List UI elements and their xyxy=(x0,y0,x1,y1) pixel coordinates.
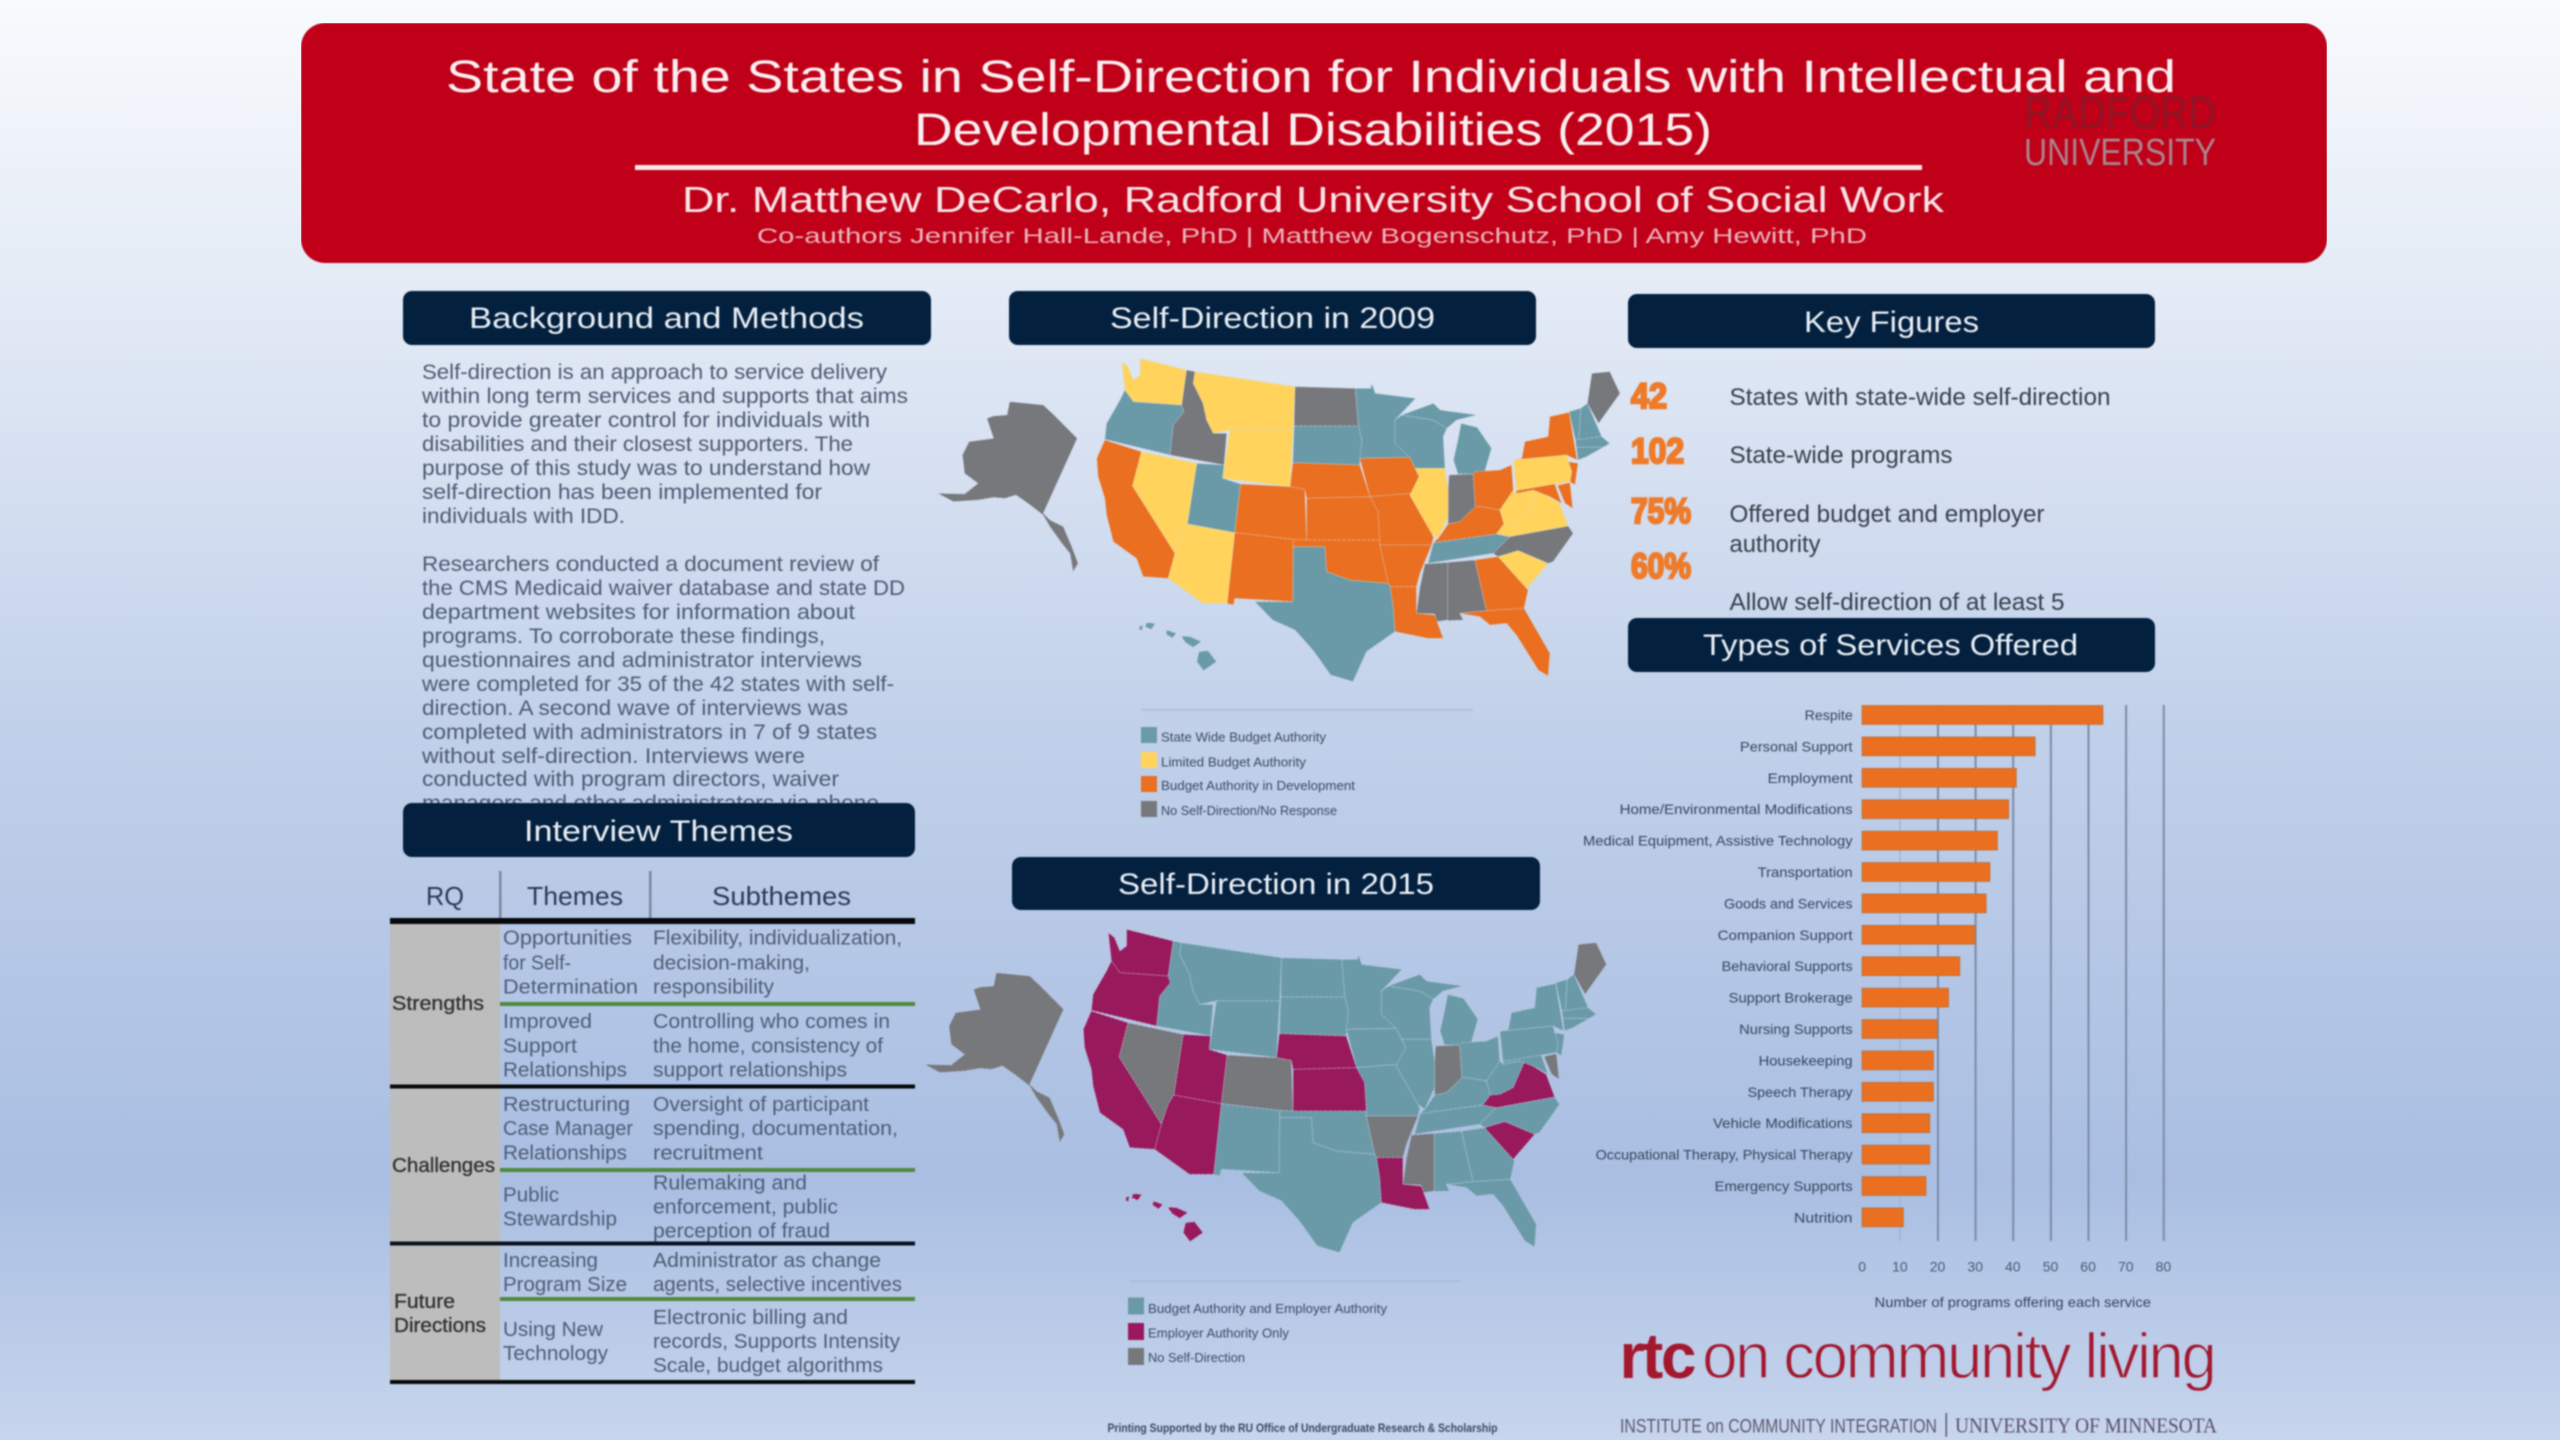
subthemes column: support relationships xyxy=(653,1060,847,1082)
RQ column shading xyxy=(390,924,500,1380)
table header row xyxy=(426,871,851,918)
figure: 102 programs xyxy=(1631,432,1952,471)
category labels: Speech Therapy xyxy=(1748,1084,1853,1100)
paragraph 2: programs. To corroborate these findings, xyxy=(422,625,825,648)
paragraph 1: self-direction has been implemented for xyxy=(422,481,822,504)
subthemes column: decision-making, xyxy=(653,953,810,975)
themes column: Program Size xyxy=(503,1274,627,1296)
axis tick labels: 0 xyxy=(1858,1258,1866,1274)
themes column: Improved xyxy=(503,1011,592,1033)
poster content xyxy=(301,23,2327,1438)
legend: 2009 map: Limited Budget Authority xyxy=(1161,756,1307,770)
figure: 42 states xyxy=(1631,377,2110,416)
states: limited budget authority xyxy=(1122,358,1572,603)
themes column: Restructuring xyxy=(503,1094,630,1116)
axis tick labels: 40 xyxy=(2005,1258,2021,1274)
heading: background and methods xyxy=(403,291,931,345)
category labels: Personal Support xyxy=(1740,738,1853,754)
title rule xyxy=(635,165,1922,170)
axis tick labels xyxy=(1858,1258,2171,1274)
legend: 2009 map: State Wide Budget Authority xyxy=(1161,730,1327,744)
category labels: Nutrition xyxy=(1794,1209,1852,1225)
category labels: Support Brokerage xyxy=(1729,990,1853,1006)
paragraph 2: department websites for information about xyxy=(422,601,855,624)
axis tick labels: 10 xyxy=(1892,1258,1908,1274)
axis tick labels: 60 xyxy=(2080,1258,2096,1274)
figure: 102 programs: State-wide programs xyxy=(1730,442,1952,469)
map: self-direction in 2015 xyxy=(924,929,1607,1253)
figure: 75% authority xyxy=(1631,492,2045,558)
subthemes column: records, Supports Intensity xyxy=(653,1331,900,1353)
table: interview themes xyxy=(390,871,915,1384)
category labels: Home/Environmental Modifications xyxy=(1620,801,1853,817)
category labels: Vehicle Modifications xyxy=(1713,1115,1852,1131)
subthemes column: Scale, budget algorithms xyxy=(653,1355,883,1377)
category labels: Emergency Supports xyxy=(1715,1178,1853,1194)
heading: key figures xyxy=(1628,294,2155,348)
paragraph 1: within long term services and supports that aims xyxy=(421,385,908,408)
category labels: Respite xyxy=(1805,707,1853,723)
subthemes column: recruitment xyxy=(653,1142,763,1164)
category labels: Medical Equipment, Assistive Technology xyxy=(1583,833,1853,849)
banner panel xyxy=(301,23,2327,263)
paragraph 1: purpose of this study was to understand how xyxy=(422,457,871,480)
bar chart: services offered xyxy=(1583,705,2171,1310)
figure: 42 states: 42 xyxy=(1631,377,1667,416)
panel: background and methods text xyxy=(421,361,908,815)
figure: 60% self-direction: Allow self-direction of at least 5 xyxy=(1730,589,2064,616)
states: state-wide budget authority xyxy=(1105,383,1610,682)
figure: 75% authority: 75% xyxy=(1631,492,1691,531)
axis tick labels: 20 xyxy=(1930,1258,1945,1274)
Radford University logo xyxy=(2024,87,2216,174)
figure: 60% self-direction xyxy=(1631,547,2064,616)
map: self-direction in 2009 xyxy=(938,358,1620,682)
Radford University logo: UNIVERSITY xyxy=(2024,132,2216,174)
subthemes column xyxy=(653,928,902,1377)
subthemes column: the home, consistency of xyxy=(653,1035,883,1057)
subthemes column: enforcement, public xyxy=(653,1196,838,1218)
paragraph 2: completed with administrators in 7 of 9 states xyxy=(422,721,877,744)
paragraph 1: disabilities and their closest supporters. The xyxy=(422,433,853,456)
paragraph 1 xyxy=(421,361,908,528)
axis title: Number of programs offering each service xyxy=(1874,1294,2151,1310)
states: Maryland and Delaware xyxy=(1503,1054,1559,1079)
table header row: Subthemes xyxy=(712,881,851,911)
paragraph 1: Self-direction is an approach to service delivery xyxy=(422,361,888,384)
category labels: Occupational Therapy, Physical Therapy xyxy=(1596,1147,1853,1163)
heading: key figures: Key Figures xyxy=(1804,306,1979,339)
heading: background and methods: Background and Methods xyxy=(469,302,864,335)
title: Developmental Disabilities (2015) xyxy=(914,104,1712,155)
legend: 2009 map: No Self-Direction/No Response xyxy=(1161,804,1337,818)
author: Dr. Matthew DeCarlo, Radford University School of Social Work xyxy=(682,179,1945,220)
research question labels: Directions xyxy=(394,1315,486,1337)
states: budget and employer authority xyxy=(1157,941,1596,1253)
axis tick labels: 70 xyxy=(2118,1258,2134,1274)
heading: types of services offered xyxy=(1628,618,2155,672)
heading: self-direction in 2015 xyxy=(1012,857,1540,910)
states: budget authority in development xyxy=(1097,412,1578,676)
legend: 2015 map: Budget Authority and Employer Authority xyxy=(1148,1302,1388,1316)
states: no self-direction xyxy=(938,370,1620,622)
themes column: Opportunities xyxy=(503,928,632,950)
grid lines xyxy=(1899,705,2165,1241)
legend: 2015 map: No Self-Direction xyxy=(1148,1351,1245,1365)
subthemes column: Electronic billing and xyxy=(653,1307,848,1329)
themes column: Determination xyxy=(503,976,638,998)
themes column: Public xyxy=(503,1184,559,1206)
themes column: Relationships xyxy=(503,1142,627,1164)
figure: 60% self-direction: 60% xyxy=(1631,547,1691,586)
table header row: RQ xyxy=(426,881,464,911)
category labels: Housekeeping xyxy=(1759,1052,1853,1068)
paragraph 2: questionnaires and administrator interviews xyxy=(422,649,862,672)
header banner xyxy=(301,23,2327,263)
themes column: Technology xyxy=(503,1343,608,1365)
title xyxy=(446,51,2176,155)
subthemes column: responsibility xyxy=(653,976,774,998)
paragraph 2: managers and other administrators via phone xyxy=(422,792,879,815)
themes column xyxy=(503,928,638,1365)
legend: 2009 map: Budget Authority in Development xyxy=(1161,779,1356,793)
heading: self-direction in 2009: Self-Direction in 2009 xyxy=(1110,302,1435,335)
co-authors: Co-authors Jennifer Hall-Lande, PhD | Matthew Bogenschutz, PhD | Amy Hewitt, PhD xyxy=(757,225,1867,248)
research question labels: Future xyxy=(394,1291,455,1313)
subthemes column: spending, documentation, xyxy=(653,1118,898,1140)
category labels xyxy=(1583,707,1853,1225)
paragraph 2 xyxy=(421,553,905,815)
paragraph 2: without self-direction. Interviews were xyxy=(421,745,805,768)
themes column: Stewardship xyxy=(503,1208,617,1230)
themes column: Relationships xyxy=(503,1060,627,1082)
states: employer authority only xyxy=(1083,929,1555,1242)
axis tick labels: 30 xyxy=(1967,1258,1983,1274)
themes column: Case Manager xyxy=(503,1118,633,1140)
Radford University logo: RADFORD xyxy=(2024,87,2216,138)
figure: 75% authority: authority xyxy=(1730,531,1820,558)
legend: 2015 map: Employer Authority Only xyxy=(1148,1326,1290,1340)
logo: RTC on Community Living: rtc xyxy=(1620,1320,1696,1392)
paragraph 2: were completed for 35 of the 42 states with self- xyxy=(421,673,894,696)
subthemes column: Administrator as change xyxy=(653,1250,881,1272)
figure: 42 states: States with state-wide self-direction xyxy=(1730,384,2110,411)
figure: 75% authority: Offered budget and employer xyxy=(1730,501,2045,528)
subthemes column: Flexibility, individualization, xyxy=(653,928,902,950)
logo: RTC on Community Living: INSTITUTE on COMMUNITY INTEGRATION xyxy=(1620,1416,1937,1438)
figure: 102 programs: 102 xyxy=(1631,432,1684,471)
category labels: Employment xyxy=(1768,770,1853,786)
research question labels xyxy=(392,993,495,1337)
axis tick labels: 80 xyxy=(2156,1258,2171,1274)
themes column: Increasing xyxy=(503,1250,598,1272)
legend: 2009 map xyxy=(1141,709,1473,818)
research question labels: Strengths xyxy=(392,993,484,1015)
category labels: Transportation xyxy=(1758,864,1853,880)
legend: 2015 map xyxy=(1128,1280,1460,1365)
themes column: Support xyxy=(503,1035,577,1057)
panel: key figures list xyxy=(1631,377,2110,616)
heading: self-direction in 2015: Self-Direction in 2015 xyxy=(1118,868,1434,901)
category labels: Goods and Services xyxy=(1724,895,1852,911)
paragraph 1: individuals with IDD. xyxy=(422,505,625,528)
table header row: Themes xyxy=(527,881,623,911)
heading: interview themes xyxy=(403,803,915,857)
category labels: Behavioral Supports xyxy=(1722,958,1853,974)
paragraph 1: to provide greater control for individuals with xyxy=(422,409,870,432)
heading: self-direction in 2009 xyxy=(1009,291,1536,345)
subthemes column: Controlling who comes in xyxy=(653,1011,890,1033)
paragraph 2: the CMS Medicaid waiver database and state DD xyxy=(422,577,905,600)
printing credit: Printing Supported by the RU Office of Undergraduate Research & Scholarship xyxy=(1108,1421,1498,1435)
logo: RTC on Community Living xyxy=(1620,1320,2218,1438)
category labels: Companion Support xyxy=(1718,927,1853,943)
paragraph 2: conducted with program directors, waiver xyxy=(422,768,839,791)
paragraph 2: direction. A second wave of interviews was xyxy=(422,697,848,720)
research question labels: Challenges xyxy=(392,1155,495,1177)
themes column: for Self- xyxy=(503,953,571,975)
logo: RTC on Community Living: on community living xyxy=(1702,1320,2217,1392)
bars xyxy=(1862,706,2103,1227)
themes column: Using New xyxy=(503,1319,604,1341)
heading: interview themes: Interview Themes xyxy=(524,815,793,848)
states: Maryland and Delaware xyxy=(1516,483,1573,508)
paragraph 2: Researchers conducted a document review of xyxy=(422,553,879,576)
subthemes column: perception of fraud xyxy=(653,1221,830,1243)
category labels: Nursing Supports xyxy=(1739,1021,1853,1037)
logo: RTC on Community Living: UNIVERSITY OF MINNESOTA xyxy=(1955,1414,2218,1438)
subthemes column: agents, selective incentives xyxy=(653,1274,902,1296)
subthemes column: Oversight of participant xyxy=(653,1094,869,1116)
heading: types of services offered: Types of Services Offered xyxy=(1703,629,2078,662)
states: no self-direction xyxy=(924,943,1607,1193)
axis tick labels: 50 xyxy=(2043,1258,2058,1274)
subthemes column: Rulemaking and xyxy=(653,1172,807,1194)
title: State of the States in Self-Direction for Individuals with Intellectual and xyxy=(446,51,2176,102)
